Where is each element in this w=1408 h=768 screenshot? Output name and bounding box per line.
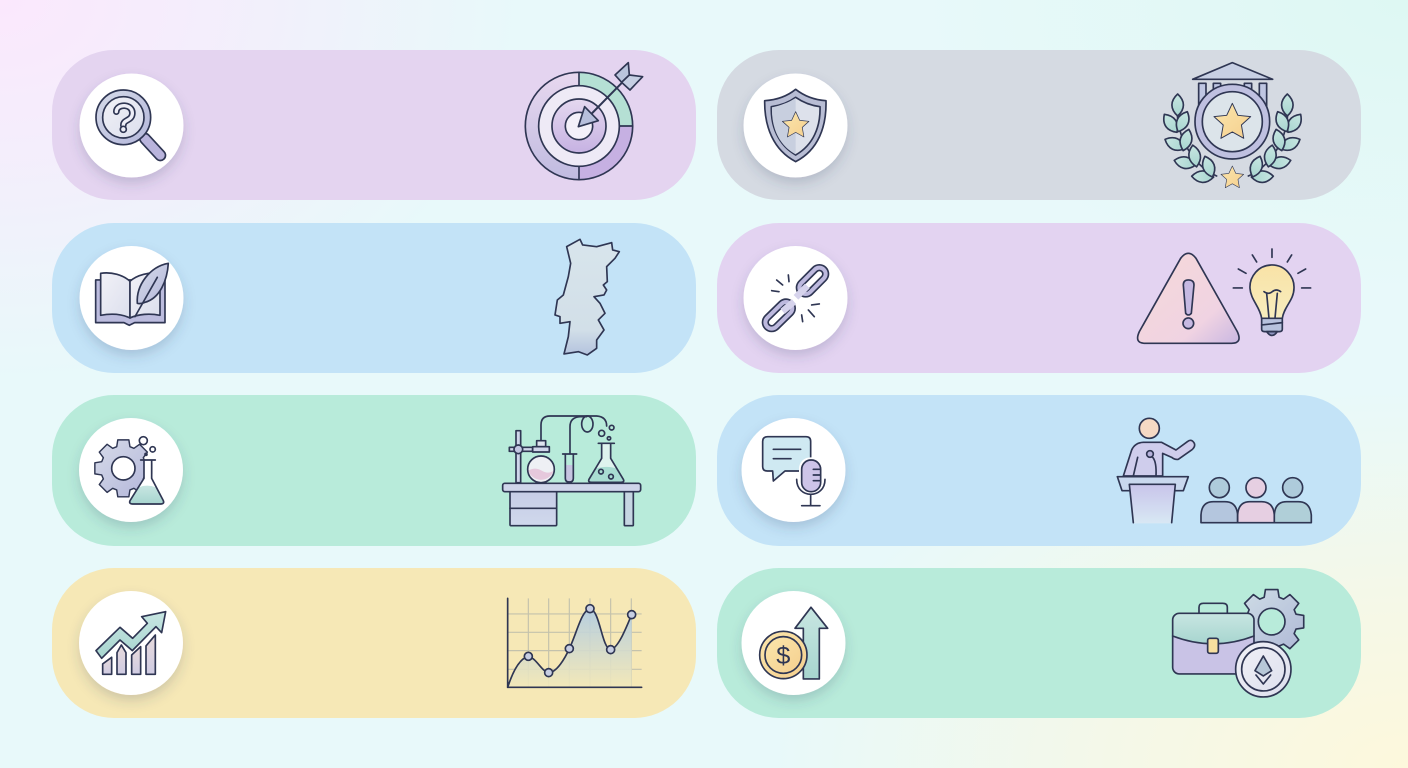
icon: magnifying glass with question mark — [80, 74, 184, 178]
panel: limitations and insights — [717, 223, 1361, 373]
panel: methods and laboratory — [52, 395, 696, 546]
panel: quality and institutional award — [717, 50, 1361, 200]
line chart — [508, 598, 642, 687]
panel: funding and business value — [717, 568, 1361, 718]
illustration: briefcase, gear and ethereum coin — [1173, 590, 1304, 697]
panel: research question and target — [52, 50, 696, 200]
icon: gear and flask — [79, 418, 183, 522]
panel: communication and presentation — [717, 395, 1361, 546]
illustration: speaker at podium and audience — [1117, 418, 1311, 523]
illustration: map of Portugal — [555, 239, 619, 355]
illustration: target with arrow — [525, 63, 643, 180]
icon: open book with feather — [80, 246, 184, 350]
illustration: laboratory bench — [503, 416, 641, 526]
icon: growth arrow over bars — [79, 591, 183, 695]
icon: speech bubble and microphone — [742, 418, 846, 522]
icon: shield with star — [744, 74, 848, 178]
illustration: warning triangle and light bulb — [1138, 249, 1311, 343]
illustration: institution emblem with laurels — [1160, 63, 1305, 188]
icon: broken chain — [744, 246, 848, 350]
icon: dollar coin and rising arrow — [742, 591, 846, 695]
icon: dollar coin and rising arrow: $ — [776, 642, 790, 670]
panel: literature and Portugal map — [52, 223, 696, 373]
panel: results and line chart — [52, 568, 696, 718]
